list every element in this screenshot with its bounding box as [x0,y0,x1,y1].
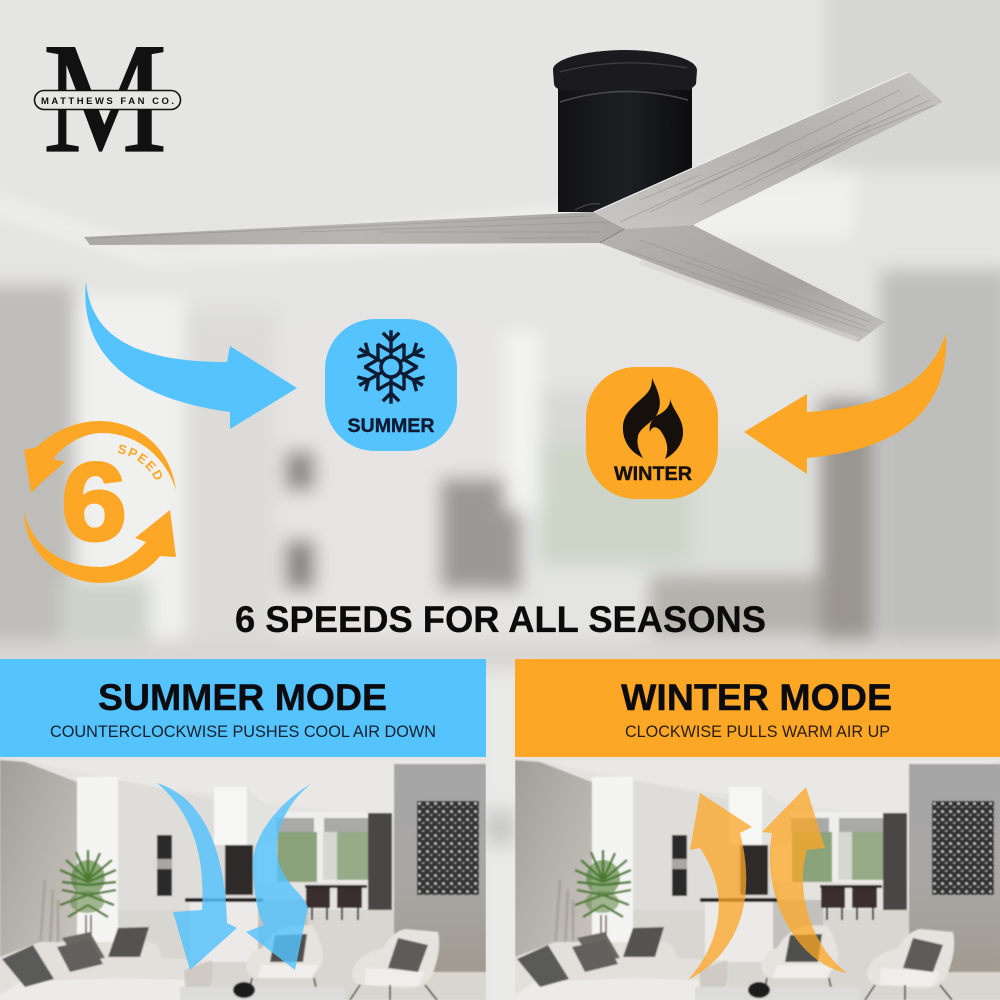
numeral 6: 6 [61,441,127,564]
panel: summer mode [0,659,486,1000]
curved speed label: SPEED [118,444,162,480]
summer subheading: COUNTERCLOCKWISE PUSHES COOL AIR DOWN [50,723,436,741]
lower circular arrow [24,510,176,583]
summer heading: SUMMER MODE [98,677,387,718]
icon: snowflake [355,332,427,402]
fan blade lower right [600,225,885,342]
fan blade left [84,212,625,245]
winter header band [515,659,1000,757]
icon badge: summer [325,319,457,451]
icon: flame [623,378,683,459]
logo: Matthews Fan Co.: MATTHEWS FAN CO. [41,96,174,107]
winter heading: WINTER MODE [621,677,892,718]
winter subheading: CLOCKWISE PULLS WARM AIR UP [625,723,890,741]
summer header band [0,659,486,757]
icon badge: winter [586,367,718,499]
label: winter: WINTER [614,463,692,485]
ceiling fan [84,50,943,342]
summer airflow arrows [157,783,312,970]
arrow: orange winter airflow [744,333,946,474]
winter airflow arrows [688,787,847,980]
logo: Matthews Fan Co.: M [43,11,167,186]
upper circular arrow [24,421,176,493]
icon: 6 speed badge [24,421,176,583]
fan motor housing [553,50,697,212]
summer room scene [0,759,486,1000]
fan blade upper right [593,72,943,229]
label: summer: SUMMER [348,415,434,437]
winter room scene [515,758,1000,1000]
panel: winter mode [515,659,1000,1000]
title: 6 SPEEDS FOR ALL SEASONS [235,599,766,640]
arrow: blue summer airflow [85,281,297,429]
